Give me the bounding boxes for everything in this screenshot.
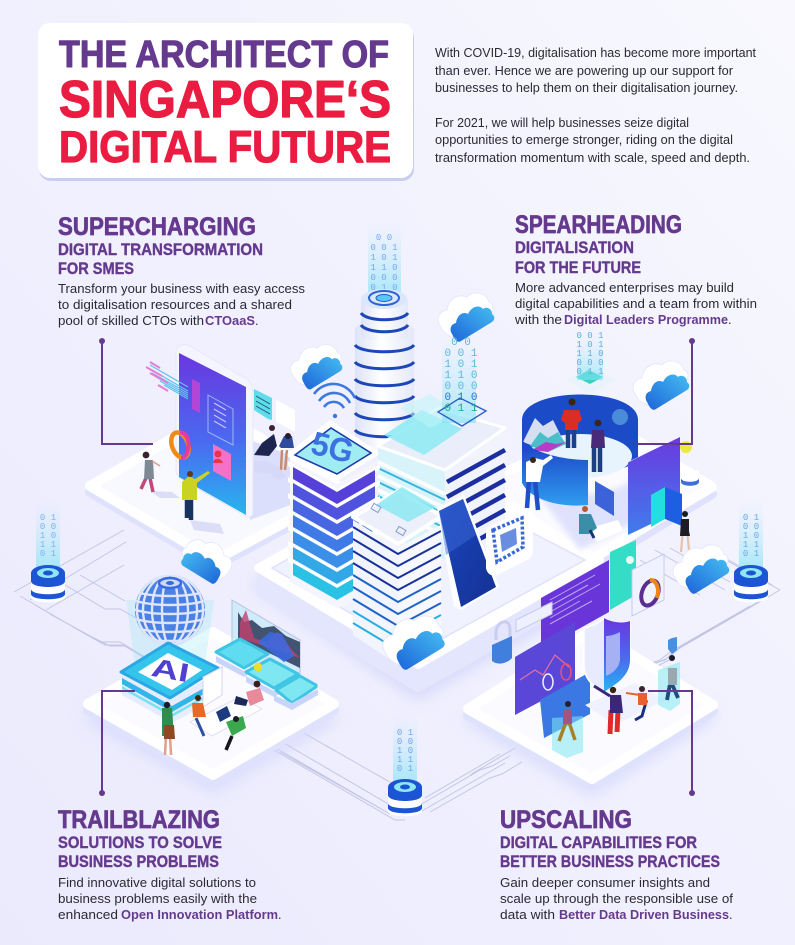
section: supercharging: DIGITAL TRANSFORMATION [58, 241, 263, 259]
wire globe [135, 575, 205, 645]
person: man in red pants [594, 686, 623, 734]
person: man in red [561, 398, 582, 448]
leader line: trailblazing [99, 691, 135, 796]
binary digits: 1 1 [743, 540, 759, 550]
platform: bottom left [88, 632, 334, 785]
5G building [288, 384, 380, 608]
section: supercharging: . [255, 314, 258, 328]
platform: central block [258, 470, 600, 693]
binary digits: 1 0 1 [370, 253, 398, 263]
section: trailblazing: Open Innovation Platform [121, 908, 278, 922]
person: man with paper [526, 455, 553, 510]
floating stripes [150, 365, 188, 399]
cyan pad 2 [246, 659, 298, 697]
laptop [216, 706, 231, 722]
binary digits: 1 1 [397, 755, 413, 765]
lightbulb [680, 441, 692, 453]
section: spearheading [514, 211, 757, 327]
tower body [355, 321, 414, 455]
data beam [368, 220, 401, 295]
platform: top right [480, 424, 712, 568]
cloud: top right [633, 361, 689, 410]
cloud: centre front [383, 616, 445, 670]
title card [38, 23, 414, 181]
intro text [435, 46, 757, 165]
mountain chart [523, 418, 564, 450]
section: trailblazing: . [278, 908, 281, 922]
title: SINGAPORE‘S [59, 70, 391, 128]
person: man in green [226, 716, 246, 750]
roof pad [438, 398, 486, 426]
section: spearheading: FOR THE FUTURE [515, 259, 641, 277]
binary digits: 0 1 [743, 549, 759, 559]
person: seated man at desk [579, 506, 597, 538]
wifi icon [314, 384, 355, 408]
binary digits: 1 0 1 [576, 340, 604, 350]
binary digits: 0 1 [397, 764, 413, 774]
cloud: above centre [438, 293, 494, 342]
section: supercharging: CTOaaS [205, 314, 255, 328]
white speech card [276, 400, 295, 432]
binary digits: 0 0 [40, 522, 56, 532]
intro text: For 2021, we will help businesses seize digital [435, 116, 689, 130]
person: woman at door [680, 511, 690, 552]
section: trailblazing: Find innovative digital solutions to [58, 876, 256, 890]
binary digits: 1 1 0 [370, 263, 398, 273]
person: woman walking [141, 452, 180, 498]
sliding card [516, 602, 552, 632]
intro text: opportunities to emerge stronger, riding on the digital [435, 133, 733, 147]
AI hub: bottom left [121, 575, 318, 755]
binary digits: 0 0 1 [444, 348, 478, 360]
section: supercharging: to digitalisation resources and a shared [58, 298, 292, 312]
room shadow [520, 470, 640, 550]
roof [353, 491, 442, 544]
binary digits: 0 0 0 [444, 381, 478, 393]
lightbulb [254, 663, 262, 671]
section: upscaling [500, 806, 734, 922]
lower screen [540, 672, 590, 738]
section: upscaling: BETTER BUSINESS PRACTICES [500, 853, 720, 871]
section: trailblazing: SOLUTIONS TO SOLVE [58, 834, 222, 852]
section: spearheading: . [728, 313, 731, 327]
navy stripes [447, 450, 505, 557]
binary digits: 0 0 [397, 737, 413, 747]
section: supercharging: FOR SMES [58, 260, 134, 278]
QR code card [486, 509, 533, 576]
binary digits: 1 1 0 [444, 370, 478, 382]
person: woman standing [162, 702, 175, 755]
section: spearheading: DIGITALISATION [515, 239, 634, 257]
person: man in orange [192, 695, 206, 736]
person: man in purple [591, 420, 605, 472]
section: upscaling: Gain deeper consumer insights and [500, 876, 710, 890]
section: spearheading: with the [514, 313, 562, 327]
circuit traces [14, 530, 780, 820]
section: supercharging: Transform your business with easy access [58, 282, 305, 296]
donut chart [168, 430, 192, 460]
roof [378, 408, 505, 470]
5G label: 5G [308, 424, 357, 470]
teal pad: left person [552, 716, 583, 758]
section: trailblazing [58, 806, 281, 922]
teal speech card [254, 389, 272, 420]
binary digits: 1 0 [397, 746, 413, 756]
padlock [496, 622, 510, 640]
AI server block [121, 643, 220, 723]
person: woman seated [626, 686, 647, 720]
person: seated man [254, 425, 277, 456]
rear code screen [541, 560, 609, 650]
checklist card [203, 667, 222, 707]
solar phone panel [437, 495, 499, 610]
person: woman in pink [234, 681, 264, 706]
wifi dot [333, 414, 337, 418]
database stack: bottom [388, 715, 422, 816]
person: seated woman [279, 433, 294, 470]
binary digits: 0 0 [451, 337, 471, 349]
data beam [739, 500, 763, 568]
AI label: AI [149, 652, 192, 688]
data beam [442, 335, 476, 423]
stripes [353, 527, 441, 650]
roof [290, 423, 376, 478]
shield [584, 618, 630, 692]
tablet frame [176, 344, 253, 517]
screen list card [208, 395, 233, 445]
roof hologram [376, 487, 436, 522]
binary digits: 0 0 [376, 233, 392, 243]
binary digits: 0 1 1 [576, 367, 604, 377]
binary digits: 0 1 [40, 549, 56, 559]
curved screen room: top right [520, 331, 699, 552]
section: spearheading: SPEARHEADING [515, 211, 682, 239]
stack [388, 779, 422, 816]
front striped building [353, 487, 442, 665]
cloud: top left [291, 344, 342, 389]
section: supercharging: SUPERCHARGING [58, 213, 256, 241]
cloud: left lower [181, 540, 232, 584]
tablet shadow [250, 440, 290, 520]
section: supercharging [58, 213, 305, 328]
binary digits: 0 1 0 [370, 283, 398, 293]
data beam [577, 332, 603, 380]
leader line: upscaling [648, 691, 695, 796]
tablet with people: top left [141, 344, 295, 534]
person: man on phone [667, 655, 678, 700]
code panel [595, 481, 614, 516]
intro text: than ever. Hence we are powering up our support for [435, 64, 733, 78]
section: trailblazing: TRAILBLAZING [58, 806, 220, 834]
section: supercharging: pool of skilled CTOs with [58, 314, 204, 328]
floor slabs [288, 461, 380, 504]
section: upscaling: data with [500, 908, 555, 922]
title: THE ARCHITECT OF [59, 33, 389, 75]
intro text: transformation momentum with scale, speed and depth. [435, 151, 750, 165]
steps [585, 683, 665, 725]
platform: bottom right [468, 630, 713, 788]
binary digits: 1 0 1 [444, 359, 478, 371]
leader line: spearheading [637, 338, 695, 444]
data beam [393, 715, 417, 783]
illustration: isometric digital city [14, 220, 780, 820]
right face [445, 428, 505, 563]
tower rings [355, 313, 414, 437]
globe beam [126, 600, 214, 672]
section: upscaling: DIGITAL CAPABILITIES FOR [500, 834, 697, 852]
platform: top left [90, 412, 345, 566]
binary digits: 0 1 1 [444, 403, 478, 415]
purple door block [628, 437, 680, 535]
section: spearheading: More advanced enterprises may build [515, 281, 734, 295]
intro text: With COVID-19, digitalisation has become more important [435, 46, 757, 60]
floor [528, 434, 632, 478]
desk [590, 520, 623, 542]
rear curved wall [522, 394, 638, 477]
teal pad: right person [658, 662, 680, 711]
section: trailblazing: enhanced [58, 908, 118, 922]
data beam [36, 500, 60, 568]
database stack: left [31, 500, 65, 602]
section: upscaling: UPSCALING [500, 806, 632, 834]
left face [378, 448, 445, 560]
person: man in yellow [182, 471, 224, 534]
security screens: bottom right [492, 540, 680, 758]
person: man with tablet [559, 701, 575, 741]
hologram [384, 410, 462, 455]
section: upscaling: scale up through the responsible use of [500, 892, 734, 906]
rear building [378, 335, 505, 563]
top server tile [565, 368, 617, 394]
body [290, 460, 375, 608]
binary digits: 0 0 1 [576, 331, 604, 341]
front data card [515, 622, 575, 715]
stack [734, 565, 768, 602]
meeting table [190, 697, 262, 736]
binary digits: 1 0 [40, 531, 56, 541]
section: spearheading: Digital Leaders Programme [564, 313, 728, 327]
section: trailblazing: BUSINESS PROBLEMS [58, 853, 219, 871]
magenta bar [192, 379, 200, 413]
stack [31, 565, 65, 602]
tablet screen [179, 353, 246, 515]
holographic chart [232, 600, 300, 696]
cyan pad 1 [216, 639, 268, 677]
binary digits: 0 1 [743, 513, 759, 523]
title: DIGITAL FUTURE [59, 123, 391, 172]
section: upscaling: Better Data Driven Business [559, 908, 729, 922]
section: trailblazing: business problems easily with the [58, 892, 257, 906]
seat [254, 461, 286, 480]
binary digits: 1 1 [40, 540, 56, 550]
binary digits: 0 1 [397, 728, 413, 738]
doorway [651, 487, 665, 527]
central round tower [355, 220, 414, 455]
title [59, 33, 391, 172]
pie [612, 409, 628, 425]
small floating shield [668, 637, 677, 654]
leader line: supercharging [99, 338, 153, 444]
binary digits: 0 1 [40, 513, 56, 523]
front curved panel [522, 440, 588, 506]
cyan pad 3 [274, 676, 318, 710]
binary digits: 1 1 0 [576, 349, 604, 359]
cloud: right lower [673, 545, 729, 594]
binary digits: 0 0 0 [370, 273, 398, 283]
binary digits: 0 0 [743, 522, 759, 532]
database stack: right [734, 500, 768, 602]
binary digits: 0 1 0 [444, 392, 478, 404]
binary digits: 1 0 [743, 531, 759, 541]
intro text: businesses to help them on their digitalisation journey. [435, 81, 738, 95]
teal profile card [610, 540, 636, 610]
binary digits: 0 0 0 [576, 358, 604, 368]
pink profile card [213, 444, 231, 481]
small cylinder [681, 470, 699, 488]
binary digits: 0 0 1 [370, 243, 398, 253]
section: spearheading: digital capabilities and a team from within [515, 297, 757, 311]
section: upscaling: . [729, 908, 732, 922]
donut chart [632, 554, 664, 616]
